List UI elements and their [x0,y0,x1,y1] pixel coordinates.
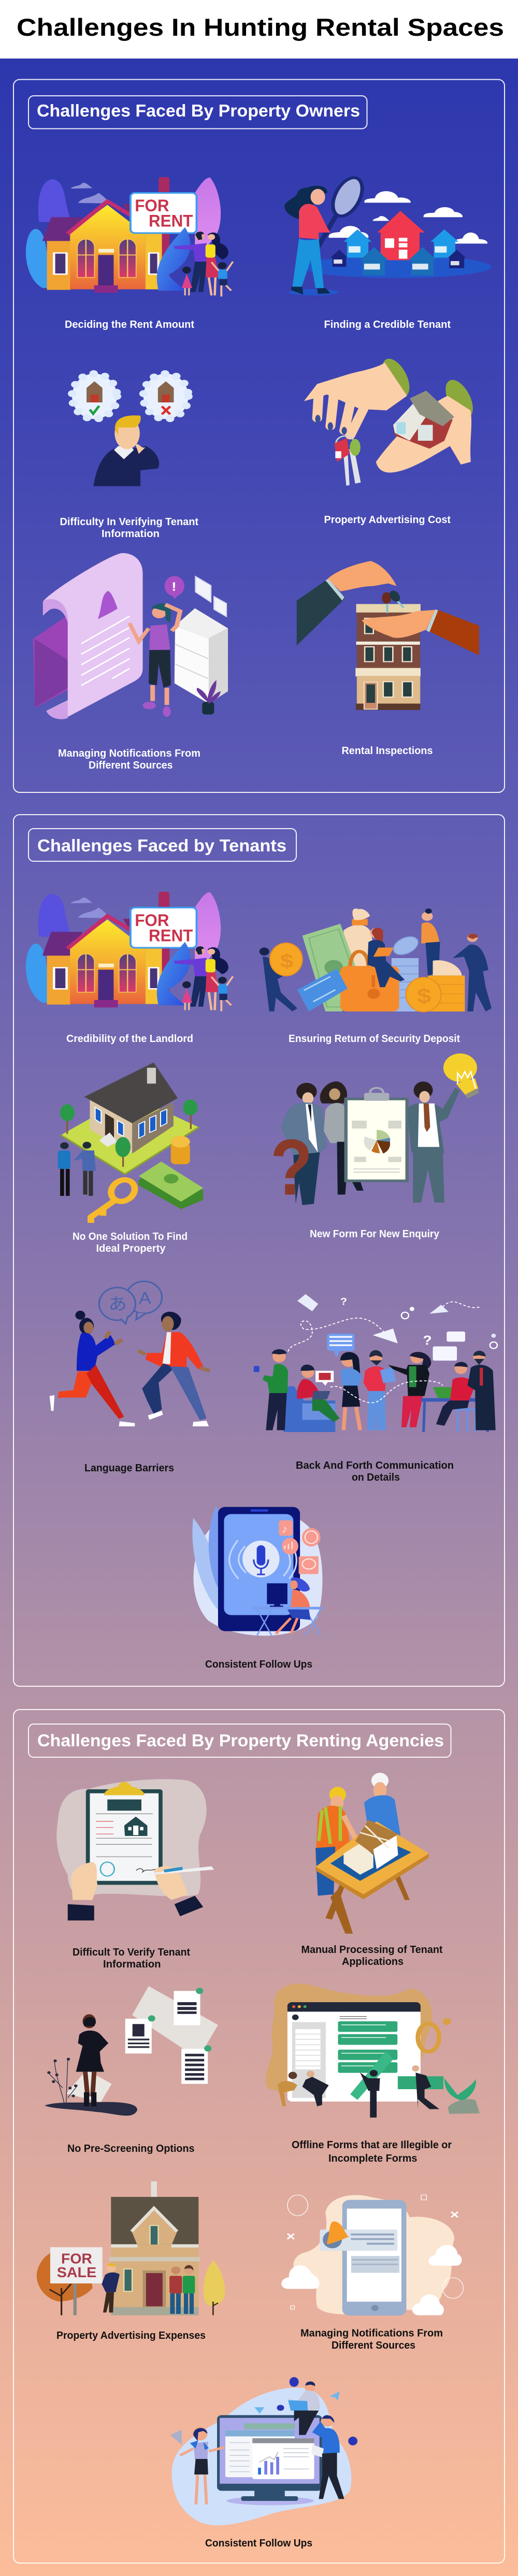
label: offline forms: Offline Forms that are Illegible or [292,2139,452,2151]
label: back and forth communication [296,1460,454,1483]
label: managing notifications: Different Sources [89,760,173,771]
label: new form for new enquiry: New Form For New Enquiry [310,1228,440,1240]
label: ensuring return of security deposit: Ensuring Return of Security Deposit [289,1033,460,1045]
illustration: oversized web form with people [266,1984,480,2118]
label: difficult to verify tenant information: Information [103,1959,161,1970]
illustration: for sale house: FOR [61,2251,92,2267]
label: difficulty verifying tenant information: Information [102,528,160,540]
label: managing notifications (agencies) [300,2327,443,2351]
illustration: notifications scroll with woman [33,553,228,719]
illustration: language barriers: あ [108,1295,127,1314]
illustration: business team with clipboard, question mark and bulb [270,1053,479,1211]
illustration: team communication with dashed paths [254,1294,497,1432]
label: difficult to verify tenant information: Difficult To Verify Tenant [73,1947,190,1958]
illustration: hands passing keys over building [297,561,479,710]
label: property advertising cost: Property Advertising Cost [324,514,451,526]
label: rental inspections: Rental Inspections [342,745,433,757]
illustration: for rent house with family: FOR [135,196,169,215]
illustration: notifications scroll with woman: ! [171,580,177,594]
illustration: for rent house with family: RENT [149,212,193,230]
label: offline forms: Incomplete Forms [328,2153,418,2164]
heading: property owners: Challenges Faced By Property Owners [37,101,360,120]
label: offline forms [292,2139,452,2164]
label: managing notifications (agencies): Different Sources [332,2340,415,2351]
label: no one solution to find ideal property [73,1231,188,1254]
illustration: woman with approved documents [45,1986,218,2116]
label: manual processing of tenant applications [301,1944,443,1967]
label: consistent follow ups (tenants): Consistent Follow Ups [205,1659,312,1670]
heading: renting agencies: Challenges Faced By Property Renting Agencies [37,1731,444,1750]
label: difficulty verifying tenant information [60,516,198,540]
label: finding a credible tenant: Finding a Credible Tenant [324,319,451,330]
illustration: for rent house with family [26,177,233,296]
illustration: phone with microphone and woman at desk: ♪ [281,1523,288,1535]
label: no one solution to find ideal property: Ideal Property [96,1243,166,1254]
illustration: business team with clipboard, question mark and bulb: ? [270,1123,312,1211]
heading: renting agencies [28,1724,451,1757]
label: consistent follow ups (agencies): Consistent Follow Ups [205,2538,312,2549]
illustration: for rent house with family: FOR [135,911,169,930]
label: managing notifications (agencies): Managing Notifications From [300,2327,443,2339]
illustration: woman with magnifier and houses [284,175,491,295]
illustration: for rent house with family: RENT [149,927,193,945]
heading: tenants: Challenges Faced by Tenants [37,836,286,855]
illustration: for rent house with family [26,892,233,1011]
illustration: money, coins and people: $ [417,985,431,1008]
illustration: money, coins and people: $ [280,950,293,972]
heading: tenants [28,829,296,861]
label: back and forth communication: Back And Forth Communication [296,1460,454,1471]
label: difficult to verify tenant information [73,1947,190,1970]
label: deciding the rent amount: Deciding the Rent Amount [65,319,194,330]
illustration: isometric house with key and cash [58,1063,203,1223]
illustration: phone with microphone and woman at desk [192,1506,323,1636]
label: language barriers: Language Barriers [84,1463,174,1474]
illustration: workers with house model on table [315,1773,429,1934]
panel: renting agencies [13,1710,505,2563]
panel: tenants [13,815,505,1686]
illustration: language barriers: A [139,1289,151,1308]
heading: property owners [28,96,367,128]
label: no pre-screening options: No Pre-Screening Options [67,2143,195,2154]
illustration: clipboard with hands signing [56,1779,214,1920]
illustration: team communication with dashed paths: ? [423,1333,432,1348]
label: difficulty verifying tenant information: Difficulty In Verifying Tenant [60,516,198,528]
panel: property owners [13,80,505,792]
illustration: team around monitor with charts [170,2377,357,2525]
label: managing notifications [58,748,200,771]
label: manual processing of tenant applications: Manual Processing of Tenant [301,1944,443,1956]
illustration: phone notification with clouds [281,2195,463,2315]
label: manual processing of tenant applications: Applications [342,1956,404,1967]
illustration: for sale house [37,2181,225,2315]
header background [0,0,518,59]
title: Challenges In Hunting Rental Spaces [17,13,504,41]
illustration: language barriers [50,1281,210,1426]
illustration: team communication with dashed paths: ? [340,1296,347,1307]
label: back and forth communication: on Details [352,1472,400,1483]
label: no one solution to find ideal property: No One Solution To Find [73,1231,188,1242]
illustration: for sale house: SALE [57,2265,96,2280]
label: managing notifications: Managing Notifications From [58,748,200,759]
illustration: hands exchanging keys and house [304,356,478,486]
illustration: thinking man with house verification bubbles [72,373,189,486]
illustration: money, coins and people [260,908,492,1012]
label: credibility of the landlord: Credibility of the Landlord [66,1033,193,1045]
label: property advertising expenses: Property Advertising Expenses [56,2330,206,2341]
